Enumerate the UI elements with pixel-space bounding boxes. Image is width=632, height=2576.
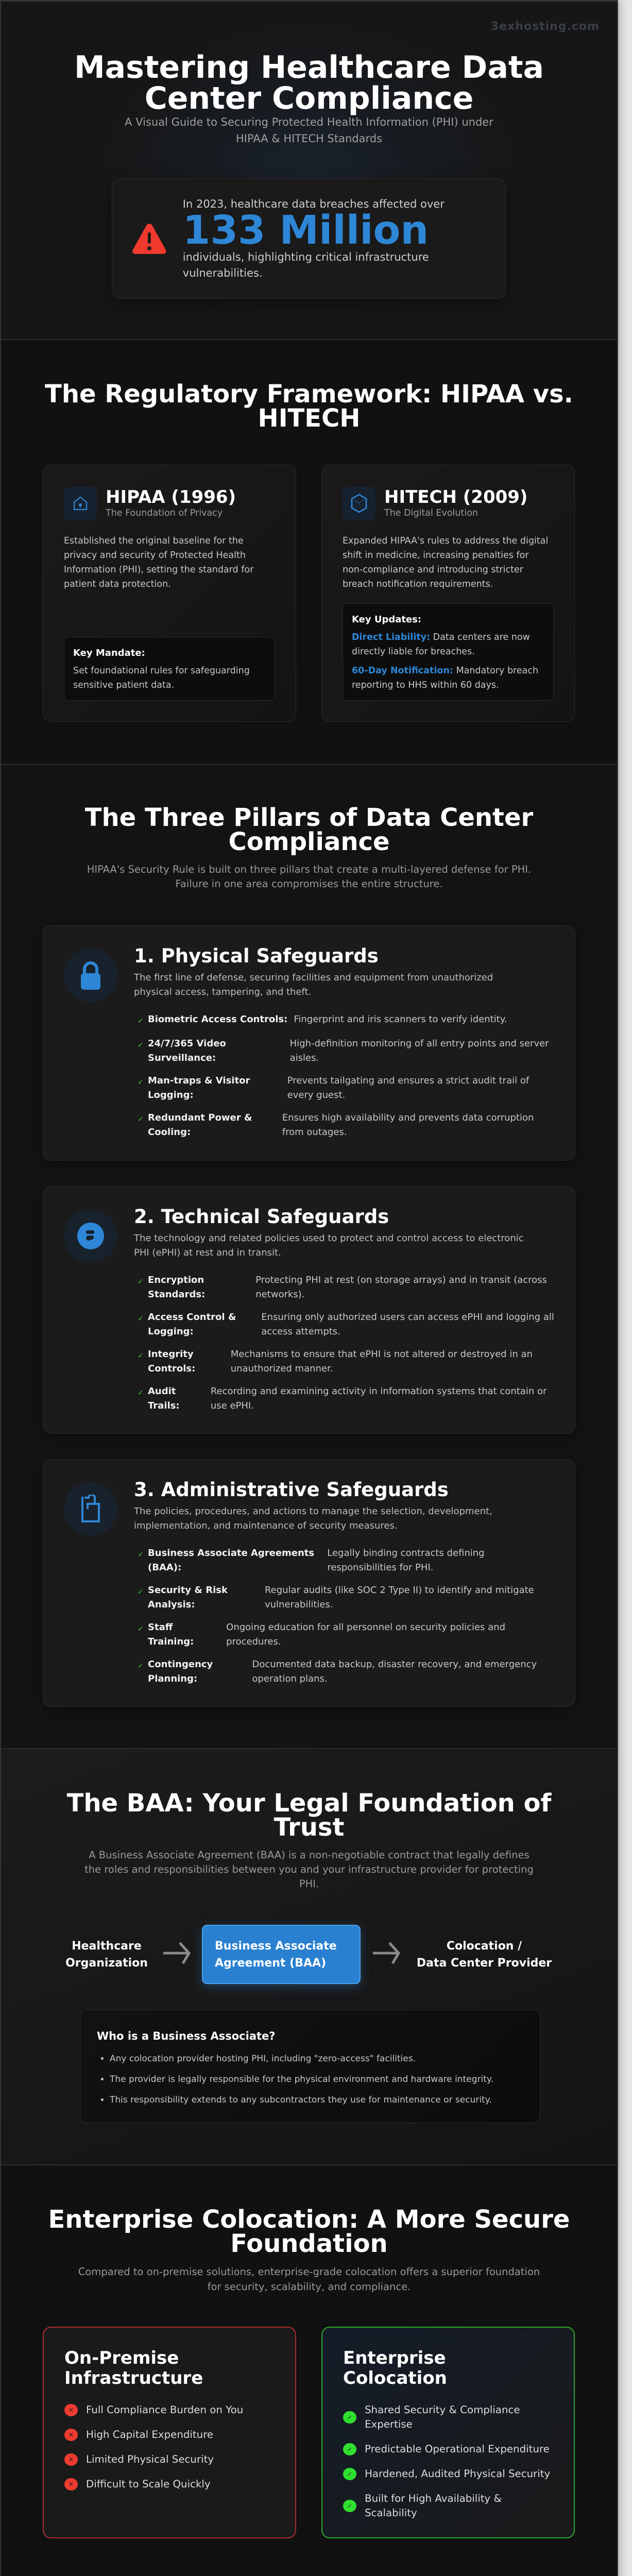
heading: The BAA: Your Legal Foundation of Trust [67,1789,551,1842]
card: enterprise colocation: ✓ [347,2414,352,2421]
watermark brand: 3exhosting.com [491,20,600,33]
card: on-premise: ✕ [69,2431,74,2438]
card: enterprise colocation: ✓ [347,2502,352,2510]
key updates box: Direct Liability: Data centers are now directly liable for breaches. [352,632,530,657]
heading: The Three Pillars of Data Center Compliance [85,803,533,856]
panel: technical safeguards: The technology and related policies used to protect and control access to electronic PHI (ePHI) at rest and in transit. [134,1233,524,1258]
panel: technical safeguards: ✓ [138,1315,144,1323]
card: enterprise colocation: Built for High Availability & Scalability [365,2493,502,2519]
who is a business associate box: This responsibility extends to any subcontractors they use for maintenance or security. [110,2095,492,2105]
panel: technical safeguards: ✓ [138,1352,144,1360]
card: enterprise colocation [321,2327,575,2538]
panel: technical safeguards: 2. Technical Safeguards [134,1206,389,1228]
panel: administrative safeguards: Ongoing education for all personnel on security policies and procedures. [226,1622,505,1647]
panel: technical safeguards [43,1186,575,1434]
panel: physical safeguards [43,925,575,1161]
panel: technical safeguards: Mechanisms to ensure that ePHI is not altered or destroyed in an unauthorized manner. [231,1349,533,1374]
key mandate box: Key Mandate: [73,648,145,658]
key updates box [343,603,554,701]
who is a business associate box [80,2010,540,2123]
panel: administrative safeguards: Legally binding contracts defining responsibilities for PHI. [327,1548,485,1573]
panel: administrative safeguards: ✓ [138,1662,144,1670]
flow: provider: Data Center Provider [417,1957,552,1970]
panel: physical safeguards: Fingerprint and iris scanners to verify identity. [294,1014,507,1025]
panel: physical safeguards: ✓ [138,1115,144,1124]
panel: technical safeguards: Integrity Controls: [148,1349,195,1374]
card: on-premise: ✕ [69,2481,74,2488]
panel: physical safeguards: Man-traps & Visitor Logging: [148,1075,250,1100]
card: enterprise colocation: Predictable Operational Expenditure [365,2443,550,2455]
card: on-premise: On-Premise Infrastructure [64,2348,203,2388]
panel: administrative safeguards: ✓ [138,1551,144,1559]
panel: physical safeguards: Biometric Access Controls: [148,1014,287,1025]
subtitle: HIPAA & HITECH Standards [236,132,382,145]
card: enterprise colocation: Enterprise Colocation [343,2348,447,2388]
card: enterprise colocation: Hardened, Audited Physical Security [365,2468,550,2480]
key updates box: Key Updates: [352,614,421,625]
card: HIPAA [43,465,296,722]
title: Mastering Healthcare Data Center Compliance [74,49,544,116]
flow: BAA box: Business Associate [215,1939,337,1953]
icon: warning triangle [132,224,166,254]
icon: shield disc [64,1209,117,1263]
panel: administrative safeguards: Business Associate Agreements (BAA): [148,1548,314,1573]
key mandate box [64,637,275,701]
panel: technical safeguards: Audit Trails: [148,1386,180,1411]
panel: technical safeguards: Access Control & Logging: [148,1312,236,1337]
key mandate box: Set foundational rules for safeguarding sensitive patient data. [73,666,250,690]
icon: cube [343,487,375,520]
panel: administrative safeguards: Regular audits (like SOC 2 Type II) to identify and mitigate vulnerabilities. [265,1585,534,1610]
panel: physical safeguards: Prevents tailgating and ensures a strict audit trail of every guest. [287,1075,529,1100]
panel: administrative safeguards: Staff Training: [148,1622,194,1647]
card: HIPAA: Established the original baseline for the privacy and security of Protected Health Information (PHI), setting the standard for patient data protection. [64,536,253,589]
who is a business associate box: Who is a Business Associate? [97,2030,275,2042]
panel: technical safeguards: Protecting PHI at rest (on storage arrays) and in transit (across networks). [255,1275,547,1300]
heading: Enterprise Colocation: A More Secure Foundation [48,2205,570,2258]
panel: physical safeguards: ✓ [138,1041,144,1049]
flow: BAA box [202,1925,361,1984]
intro text: PHI. [299,1878,319,1890]
flow: healthcare organization: Organization [65,1957,148,1970]
section: regulatory framework [1,340,617,765]
who is a business associate box: Any colocation provider hosting PHI, including "zero-access" facilities. [110,2054,416,2064]
card: on-premise [43,2327,296,2538]
section: three pillars [1,765,617,1749]
panel: administrative safeguards: Documented data backup, disaster recovery, and emergency operation plans. [252,1659,537,1684]
section: BAA [1,1749,617,2165]
card: HITECH: Expanded HIPAA's rules to address the digital shift in medicine, increasing penalties for non‑compliance and introducing stricter breach notification requirements. [343,536,548,589]
icon: clipboard [64,1482,117,1536]
flow: BAA box: Agreement (BAA) [215,1957,326,1969]
stat text: 133 Million [183,207,429,253]
panel: technical safeguards: ✓ [138,1389,144,1397]
flow: healthcare organization: Healthcare [72,1940,142,1953]
card: HITECH: The Digital Evolution [384,508,478,518]
intro text: Compared to on-premise solutions, enterprise-grade colocation offers a superior foundation for security, scalability, and compliance. [78,2266,540,2293]
intro text: the roles and responsibilities between you and your infrastructure provider for protecting [84,1863,534,1875]
panel: administrative safeguards: The policies, procedures, and actions to manage the selection, development, implementation, and maintenance of security measures. [134,1506,492,1531]
card: HITECH [321,465,575,722]
panel: administrative safeguards: ✓ [138,1588,144,1596]
card: enterprise colocation: ✓ [347,2470,352,2478]
comparison cards [43,465,575,722]
arrow [373,1942,400,1964]
intro text [84,1849,534,1890]
intro text: HIPAA's Security Rule is built on three pillars that create a multi-layered defense for PHI. Failure in one area compromises the entire structure. [87,863,531,890]
panel: physical safeguards: High-definition monitoring of all entry points and server aisles. [290,1038,549,1063]
arrow [163,1942,191,1964]
card: HITECH: HITECH (2009) [384,487,527,507]
card: enterprise colocation: ✓ [347,2446,352,2453]
panel: technical safeguards: Recording and examining activity in information systems that contain or use ePHI. [211,1386,546,1411]
panel: technical safeguards: Ensuring only authorized users can access ePHI and logging all access attempts. [261,1312,554,1337]
flow: healthcare organization [65,1940,148,1970]
flow: provider: Colocation / [447,1940,522,1953]
stat text: In 2023, healthcare data breaches affected over individuals, highlighting critical infrastructure vulnerabilities. [183,198,445,279]
panel: physical safeguards: Ensures high availability and prevents data corruption from outages. [282,1112,534,1138]
panel: administrative safeguards: 3. Administrative Safeguards [134,1479,449,1501]
card: on-premise: High Capital Expenditure [86,2429,213,2441]
card: on-premise: Limited Physical Security [86,2453,214,2465]
panel: administrative safeguards: ✓ [138,1625,144,1633]
flow: provider [417,1940,552,1970]
key updates box: 60-Day Notification: Mandatory breach reporting to HHS within 60 days. [352,666,538,690]
subtitle [125,116,493,145]
panel: administrative safeguards: Contingency Planning: [148,1659,213,1684]
intro text: A Business Associate Agreement (BAA) is a non-negotiable contract that legally defines [89,1849,529,1861]
card: on-premise: ✕ [69,2456,74,2463]
icon: padlock [64,948,117,1002]
icon: house [64,487,97,520]
panel: physical safeguards: 24/7/365 Video Surveillance: [148,1038,226,1063]
panel: physical safeguards: ✓ [138,1078,144,1087]
panel: technical safeguards: ✓ [138,1278,144,1286]
card: on-premise: Difficult to Scale Quickly [86,2478,211,2490]
stat callout [112,178,506,299]
section: enterprise colocation [1,2165,617,2576]
card: HIPAA: HIPAA (1996) [106,487,236,507]
card: on-premise: Full Compliance Burden on You [86,2404,243,2416]
comparison cards [43,2327,575,2538]
who is a business associate box: The provider is legally responsible for the physical environment and hardware integrity. [110,2074,493,2084]
panel: technical safeguards: Encryption Standards: [148,1275,205,1300]
card: enterprise colocation: Shared Security & Compliance Expertise [365,2404,520,2430]
panel: administrative safeguards: Security & Risk Analysis: [148,1585,228,1610]
subtitle: A Visual Guide to Securing Protected Health Information (PHI) under [125,116,493,128]
panel: physical safeguards: ✓ [138,1017,144,1025]
card: HIPAA: The Foundation of Privacy [106,508,223,518]
heading: The Regulatory Framework: HIPAA vs. HITECH [45,380,573,433]
panel: physical safeguards: 1. Physical Safeguards [134,945,379,967]
card: on-premise: ✕ [69,2406,74,2414]
panel: physical safeguards: Redundant Power & Cooling: [148,1112,252,1138]
panel: physical safeguards: The first line of defense, securing facilities and equipment from unauthorized physical access, tampering, and theft. [134,972,493,997]
panel: administrative safeguards [43,1459,575,1707]
hero section [1,2,617,340]
